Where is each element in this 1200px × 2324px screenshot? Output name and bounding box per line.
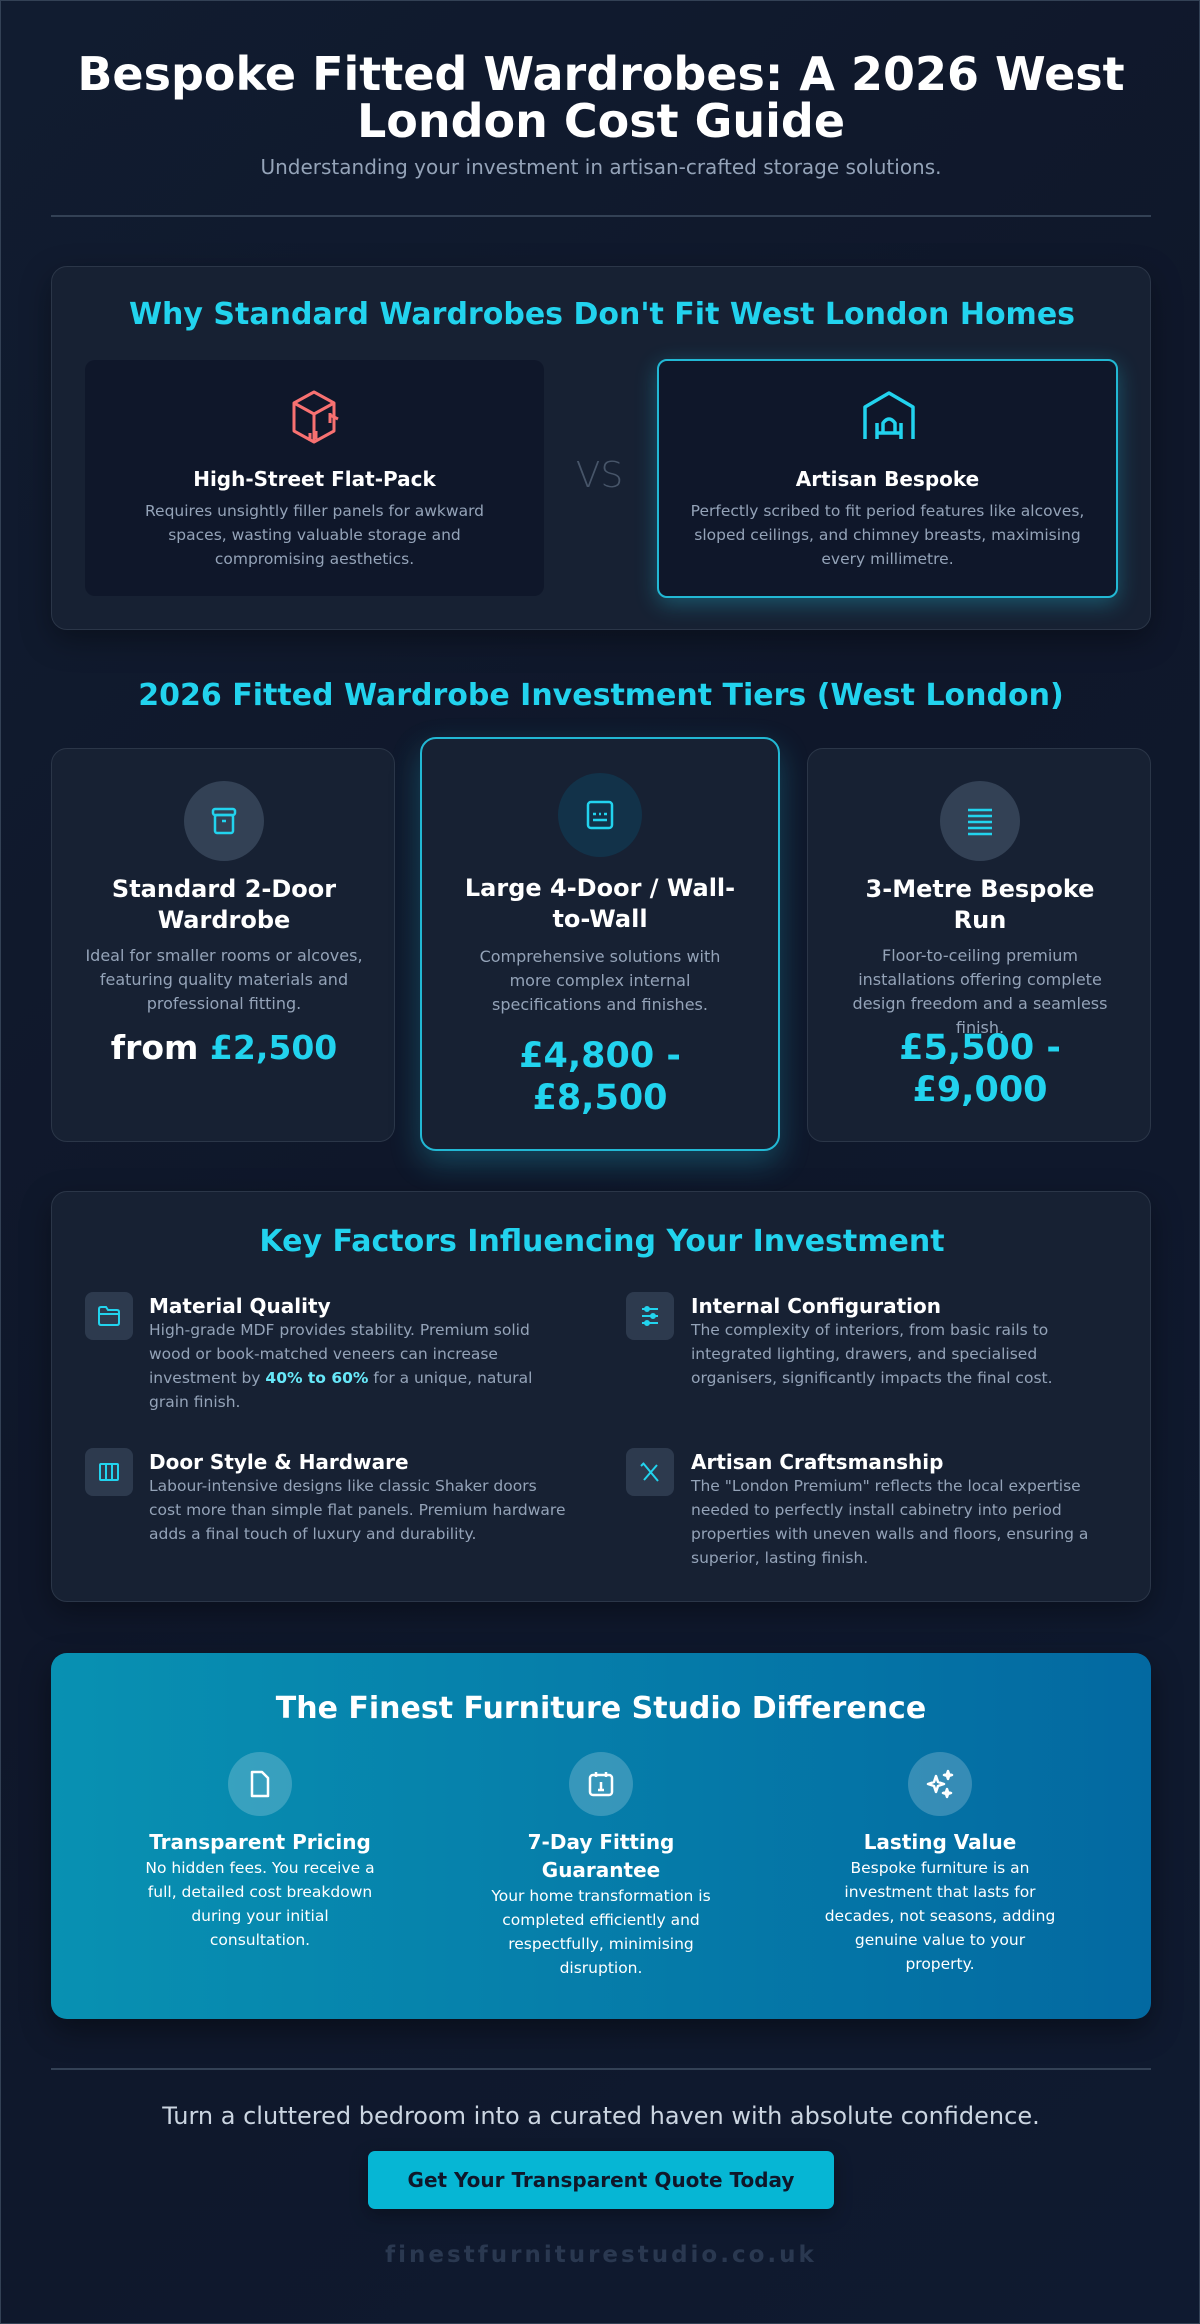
icon: run (940, 781, 1020, 861)
text: website: finestfurniturestudio.co.uk (385, 2242, 817, 2268)
text: craftsmanship: The "London Premium" reflects the local expertise needed to perfectly install cabinetry into period properties with uneven walls and floors, ensuring a superior, lasting finish. (691, 1477, 1088, 1567)
card: flat-pack (85, 360, 544, 596)
text: large description: Comprehensive solutions with more complex internal specifications and finishes. (480, 947, 720, 1014)
icon: folder (85, 1292, 133, 1340)
title: Bespoke Fitted Wardrobes: A 2026 West (77, 47, 1125, 101)
text: run price: £9,000 (912, 1070, 1048, 1110)
icon: sparkles (908, 1752, 972, 1816)
heading: studio difference: The Finest Furniture Studio Difference (276, 1691, 926, 1726)
column: fitting guarantee: Your home transformation is completed efficiently and respectfully, minimising disruption. (491, 1887, 711, 1977)
heading: why standard: Why Standard Wardrobes Don't Fit West London Homes (129, 297, 1075, 332)
column: fitting guarantee: 7-Day Fitting (528, 1830, 674, 1854)
text: flat-pack title: High-Street Flat-Pack (193, 467, 436, 491)
column: lasting value (825, 1752, 1055, 1973)
title (77, 47, 1125, 148)
icon: doors (85, 1448, 133, 1496)
heading: investment tiers: 2026 Fitted Wardrobe Investment Tiers (West London) (138, 678, 1064, 713)
subtitle: Understanding your investment in artisan-crafted storage solutions. (260, 155, 942, 179)
title: London Cost Guide (357, 94, 845, 148)
icon: standard (184, 781, 264, 861)
text: run title (866, 875, 1094, 934)
column: transparent pricing (145, 1752, 375, 1949)
text: tagline: Turn a cluttered bedroom into a curated haven with absolute confidence. (162, 2102, 1040, 2130)
text: door style: Door Style & Hardware (149, 1450, 409, 1474)
icon: calendar (569, 1752, 633, 1816)
icon: box (292, 390, 339, 444)
icon: tools (626, 1448, 674, 1496)
text: bespoke title: Artisan Bespoke (796, 467, 979, 491)
column: lasting value: Bespoke furniture is an investment that lasts for decades, not seasons, adding genuine value to your property. (825, 1859, 1055, 1973)
icon: sliders (626, 1292, 674, 1340)
card: tier large (420, 737, 780, 1151)
button: get quote: Get Your Transparent Quote Today (408, 2168, 794, 2192)
text: large title: to-Wall (552, 905, 648, 933)
column: transparent pricing: Transparent Pricing (149, 1830, 371, 1854)
text: run description: Floor-to-ceiling premium installations offering complete design freedom and a seamless finish. (853, 946, 1107, 1037)
text: VS: VS (576, 455, 623, 496)
text: large title (465, 874, 735, 933)
text: bespoke description: Perfectly scribed to fit period features like alcoves, sloped ceilings, and chimney breasts, maximising every millimetre. (691, 502, 1084, 568)
card: tier run (807, 748, 1151, 1142)
button: get quote (368, 2151, 834, 2209)
text: large price: £4,800 - (519, 1036, 681, 1076)
column: lasting value: Lasting Value (864, 1830, 1016, 1854)
text: run title: 3-Metre Bespoke (866, 875, 1094, 903)
factor: craftsmanship (626, 1448, 1088, 1567)
text: run price (899, 1028, 1061, 1110)
factor: internal (626, 1292, 1053, 1387)
text: internal: Internal Configuration (691, 1294, 941, 1318)
text: large title: Large 4-Door / Wall- (465, 874, 735, 902)
text: run price: £5,500 - (899, 1028, 1061, 1068)
icon: house (863, 391, 915, 439)
text: large price (519, 1036, 681, 1118)
icon: large (558, 773, 642, 857)
text: material: Material Quality (149, 1294, 331, 1318)
text: flat-pack description: Requires unsightly filler panels for awkward spaces, wasting valuable storage and compromising aesthetics. (145, 502, 484, 568)
panel: key factors (51, 1191, 1151, 1602)
icon: document (228, 1752, 292, 1816)
column: transparent pricing: No hidden fees. You receive a full, detailed cost breakdown during your initial consultation. (145, 1859, 375, 1949)
factor: material (85, 1292, 532, 1411)
text: internal: The complexity of interiors, from basic rails to integrated lighting, drawers, and specialised organisers, significantly impacts the final cost. (691, 1321, 1053, 1387)
factor: door style (85, 1448, 566, 1543)
text: craftsmanship: Artisan Craftsmanship (691, 1450, 943, 1474)
panel: studio difference (51, 1653, 1151, 2019)
text: standard title: Wardrobe (158, 906, 290, 934)
heading: key factors: Key Factors Influencing Your Investment (259, 1224, 945, 1259)
text: run title: Run (954, 906, 1006, 934)
text: standard title: Standard 2-Door (112, 875, 336, 903)
text: standard price: from £2,500 (111, 1028, 337, 1067)
text: material: High-grade MDF provides stability. Premium solid wood or book-matched veneers can increase investment by 40% to 60% for a unique, natural grain finish. (149, 1321, 532, 1411)
card: tier standard (51, 748, 395, 1142)
column: fitting guarantee (491, 1752, 711, 1977)
text: large price: £8,500 (532, 1078, 668, 1118)
text: door style: Labour-intensive designs like classic Shaker doors cost more than simple flat panels. Premium hardware adds a final touch of luxury and durability. (149, 1477, 566, 1543)
card: bespoke (657, 359, 1118, 598)
column: fitting guarantee: Guarantee (542, 1858, 660, 1882)
panel: comparison (51, 266, 1151, 630)
text: standard description: Ideal for smaller rooms or alcoves, featuring quality materials and professional fitting. (85, 946, 363, 1013)
text: standard title (112, 875, 336, 934)
